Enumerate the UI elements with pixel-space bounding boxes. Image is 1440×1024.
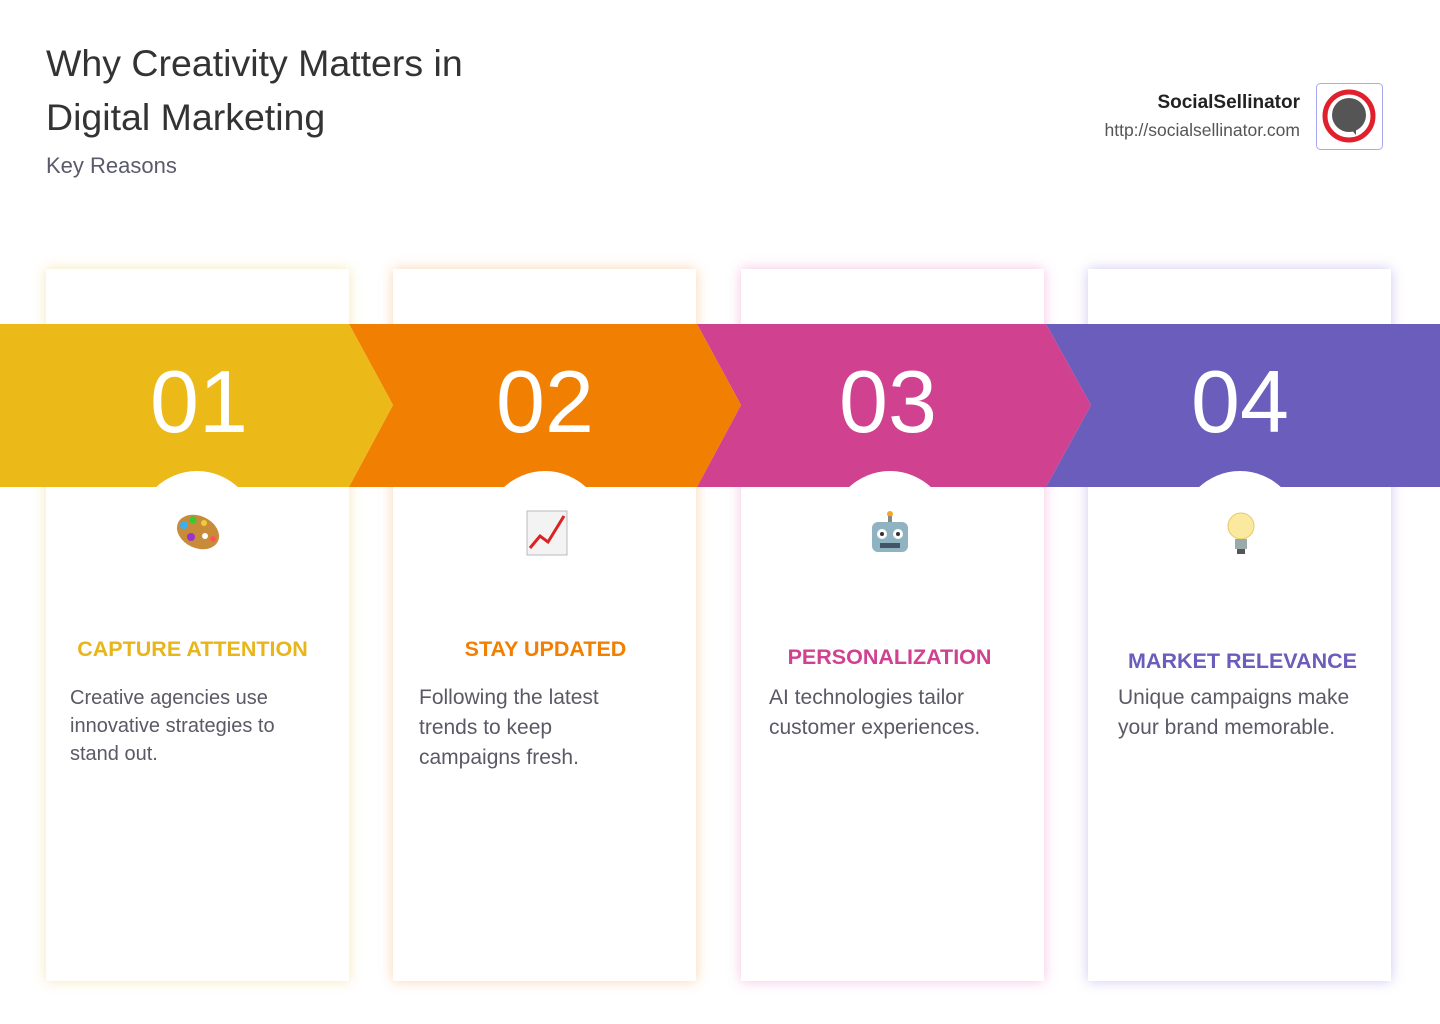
logo [1316,83,1383,150]
text 1: Creative agencies use [70,687,268,709]
text 2: campaigns fresh. [419,746,579,769]
heading 2: STAY UPDATED [465,637,626,661]
text 4: Unique campaigns make [1118,686,1349,709]
heading 1: CAPTURE ATTENTION [77,637,308,661]
text 3: customer experiences. [769,716,980,739]
card 4 [1088,269,1391,981]
icon: robot [872,511,908,552]
text 1: stand out. [70,743,158,765]
icon: chart [526,510,568,556]
title [46,42,463,138]
text 2: Following the latest [419,686,599,709]
card 3 [741,269,1044,981]
text 4 [1118,686,1349,739]
number 04: 04 [1191,352,1289,451]
text 2: trends to keep [419,716,552,739]
card 1 [46,269,349,981]
number 02: 02 [496,352,594,451]
heading 4: MARKET RELEVANCE [1128,649,1357,673]
text 1 [70,687,275,765]
subtitle: Key Reasons [46,153,177,178]
brand block [1104,83,1383,150]
text 3: AI technologies tailor [769,686,964,709]
text 4: your brand memorable. [1118,716,1335,739]
icon: bulb [1228,512,1254,554]
text 1: innovative strategies to [70,715,275,737]
brand name: SocialSellinator [1157,92,1300,113]
text 3 [769,686,980,739]
title: Digital Marketing [46,96,325,138]
text 2 [419,686,599,769]
heading 3: PERSONALIZATION [788,645,991,669]
icon: palette [176,514,220,550]
card 2 [393,269,696,981]
brand url: http://socialsellinator.com [1104,120,1300,140]
title: Why Creativity Matters in [46,42,463,84]
number 03: 03 [839,352,937,451]
number 01: 01 [150,352,248,451]
arrow band [0,324,1440,487]
